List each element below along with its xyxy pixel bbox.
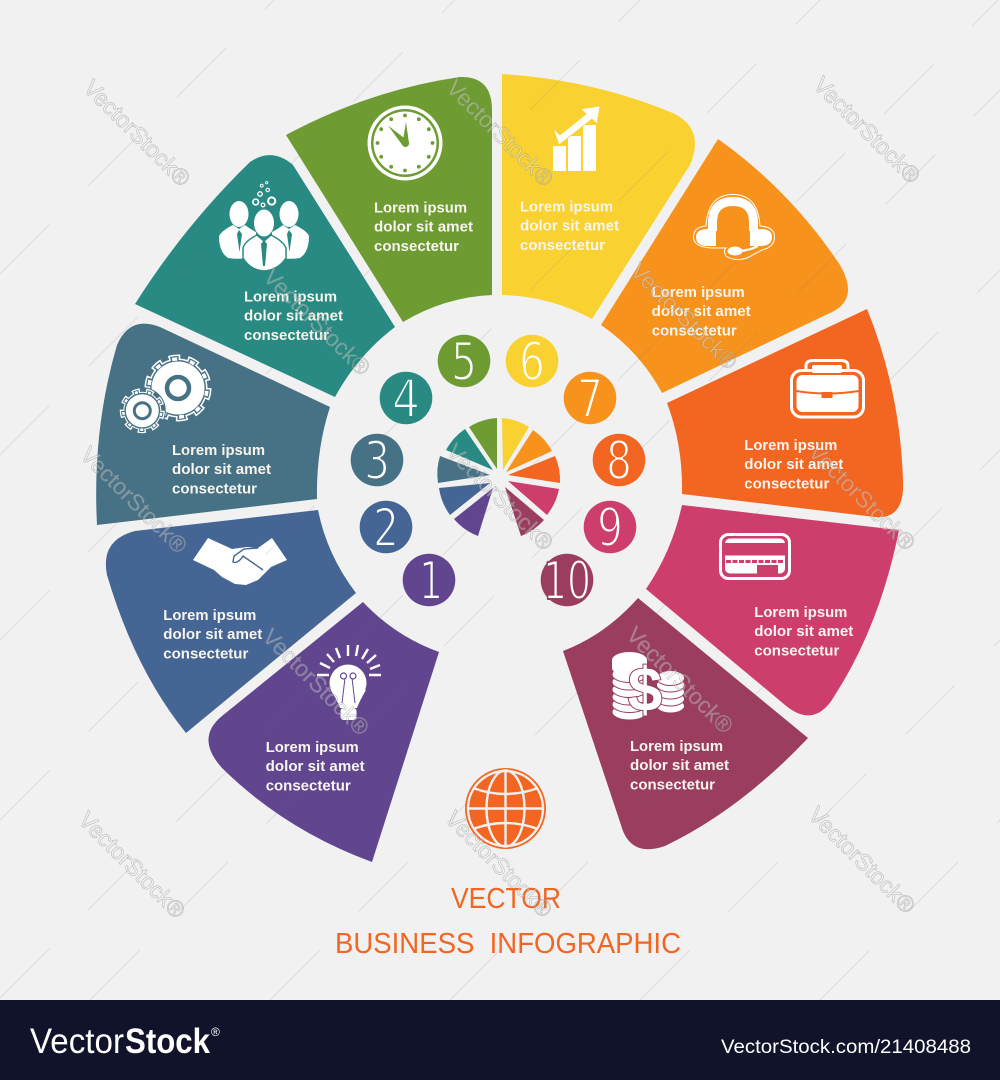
icon: gears <box>123 358 208 430</box>
watermarks: VectorStock® <box>625 257 743 375</box>
icon: coins with dollar <box>612 652 684 725</box>
text: panel 7 <box>652 284 751 340</box>
icon: rising chart <box>553 106 600 171</box>
footer bar <box>0 1000 1000 1080</box>
footer logo: Vector <box>30 1022 124 1061</box>
watermarks: VectorStock® <box>803 438 921 556</box>
title: VECTOR <box>451 883 561 915</box>
panel 9: pink segment <box>646 505 899 715</box>
watermarks: VectorStock® <box>75 441 193 559</box>
watermarks: VectorStock® <box>621 621 739 739</box>
footer logo: ® <box>211 1025 220 1039</box>
text: panel 7: dolor sit amet <box>652 303 751 320</box>
text: panel 1: consectetur <box>266 778 351 794</box>
text: panel 3: consectetur <box>172 480 257 498</box>
title <box>335 883 681 960</box>
watermarks: VectorStock® <box>440 805 558 923</box>
text: panel 5: Lorem ipsum <box>374 200 467 216</box>
watermarks: VectorStock® <box>803 801 921 919</box>
numbered circles: 10 <box>543 551 591 612</box>
icon: handshake <box>193 538 287 585</box>
text: panel 6: Lorem ipsum <box>520 198 613 216</box>
text: panel 8: Lorem ipsum <box>744 437 837 454</box>
text: panel 8: dolor sit amet <box>744 456 843 473</box>
watermarks: VectorStock® <box>441 74 559 192</box>
numbered circles: 1 <box>419 551 443 612</box>
numbered circles: 2 <box>373 498 399 559</box>
text: panel 5: dolor sit amet <box>374 218 473 236</box>
numbered circles: 4 <box>392 369 420 430</box>
numbered circles: 3 <box>364 431 390 492</box>
panel 7: orange segment <box>601 139 848 393</box>
watermarks: VectorStock® <box>73 806 191 924</box>
text: panel 6 <box>520 198 619 254</box>
text: panel 2: consectetur <box>163 646 248 662</box>
numbered circles: 6 <box>519 332 545 393</box>
text: panel 7: Lorem ipsum <box>652 284 745 301</box>
watermarks: VectorStock® <box>257 623 375 741</box>
text: panel 3: dolor sit amet <box>172 461 271 478</box>
numbered circles: 8 <box>606 431 632 492</box>
watermarks: VectorStock® <box>441 438 559 556</box>
numbered circles: 9 <box>597 498 623 559</box>
icon: coins with dollar: $ <box>628 656 662 725</box>
text: panel 2 <box>163 607 262 662</box>
text: panel 1: dolor sit amet <box>266 758 365 775</box>
numbered circles <box>351 332 645 612</box>
text: panel 10 <box>630 738 729 794</box>
numbered circles: 7 <box>577 369 603 430</box>
footer logo <box>30 1022 220 1061</box>
panel 10: maroon segment <box>563 598 808 849</box>
text: panel 9: consectetur <box>754 642 839 660</box>
text: panel 3 <box>172 442 271 498</box>
numbered circles: 5 <box>451 332 477 393</box>
footer logo: Stock <box>125 1022 210 1061</box>
text: panel 9: Lorem ipsum <box>754 604 847 621</box>
text: panel 8: consectetur <box>744 476 829 492</box>
icon: globe <box>465 768 546 849</box>
panel 1: purple segment <box>208 602 439 862</box>
text: panel 10: dolor sit amet <box>630 757 729 774</box>
icon: credit card <box>720 534 790 578</box>
watermarks: VectorStock® <box>78 74 196 192</box>
panel 6: yellow segment <box>502 74 695 319</box>
text: panel 9: dolor sit amet <box>754 623 853 640</box>
watermarks <box>73 71 926 924</box>
text: panel 6: consectetur <box>520 237 605 254</box>
text: panel 2: dolor sit amet <box>163 626 262 643</box>
text: panel 4: Lorem ipsum <box>244 288 337 306</box>
text: panel 4: consectetur <box>244 327 329 344</box>
text: panel 4 <box>244 288 343 344</box>
text: panel 1: Lorem ipsum <box>266 739 359 756</box>
panel 8: dark orange segment <box>667 309 903 517</box>
watermarks: VectorStock® <box>808 71 926 189</box>
text: panel 5: consectetur <box>374 238 459 255</box>
text: panel 10: consectetur <box>630 776 715 794</box>
panel 4: teal segment <box>135 155 395 397</box>
icon: briefcase <box>792 360 864 417</box>
icon: headset <box>694 194 774 260</box>
icon: light bulb <box>317 645 381 720</box>
panel 2: blue segment <box>106 510 356 733</box>
title: BUSINESS INFOGRAPHIC <box>335 928 681 960</box>
text: panel 5 <box>374 200 473 255</box>
text: panel 9 <box>754 604 853 660</box>
icon: team with gears <box>219 182 309 271</box>
central mini pie <box>437 418 560 536</box>
text: panel 2: Lorem ipsum <box>163 607 256 624</box>
watermarks: VectorStock® <box>258 263 376 381</box>
footer url: VectorStock.com/21408488 <box>721 1037 971 1058</box>
icon: clock <box>368 106 442 180</box>
panel 3: slate segment <box>96 324 330 525</box>
text: panel 1 <box>266 739 365 794</box>
text: panel 7: consectetur <box>652 322 737 340</box>
text: panel 4: dolor sit amet <box>244 308 343 324</box>
text: panel 3: Lorem ipsum <box>172 442 265 459</box>
text: panel 10: Lorem ipsum <box>630 738 723 755</box>
text: panel 6: dolor sit amet <box>520 218 619 234</box>
text: panel 8 <box>744 437 843 492</box>
panel 5: green segment <box>286 77 492 322</box>
